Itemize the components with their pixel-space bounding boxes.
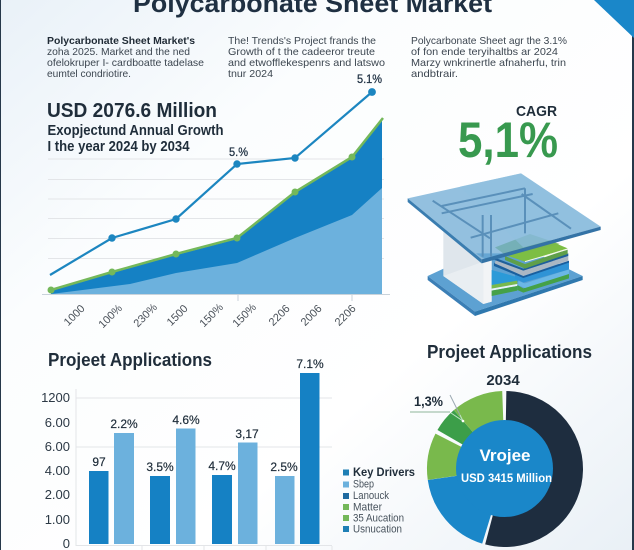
area and line chart: 5.1% <box>357 74 382 86</box>
text block: trends <box>228 35 385 80</box>
donut chart: Vrojee <box>479 446 531 465</box>
text block: market intro <box>47 35 204 80</box>
corner accent triangle <box>594 0 634 38</box>
bar chart: 4.00 <box>45 463 70 478</box>
text block: market intro: eumtel condriotire. <box>47 68 131 80</box>
bar chart: 4.7% <box>208 459 236 473</box>
headline value <box>47 100 224 155</box>
bar chart: 2.00 <box>45 487 70 502</box>
legend: key drivers: Key Drivers <box>353 465 415 479</box>
heading: donut chart: Projeet Applications <box>427 342 592 362</box>
area and line chart: 5.% <box>229 147 248 159</box>
area and line chart: 150% <box>231 301 259 330</box>
heading: bar chart: Projeet Applications <box>48 350 212 370</box>
area and line chart: 2206 <box>333 303 359 329</box>
text block: trends: tnur 2024 <box>228 68 273 80</box>
text block: market intro: ofelokruper I- cardboatte tadelase <box>47 57 204 69</box>
bar chart: 97 <box>92 455 106 469</box>
area and line chart: 230% <box>132 301 160 330</box>
text block: outlook: andbtrair. <box>411 68 458 80</box>
text block: market intro: Polycarbonate Sheet Market's <box>47 35 195 47</box>
text block: trends: The! Trends's Project frands the <box>228 35 376 47</box>
bar chart: 2.5% <box>270 460 298 474</box>
CAGR callout: CAGR <box>516 103 557 120</box>
text block: outlook <box>411 35 567 80</box>
area and line chart: 100% <box>97 302 125 331</box>
bar chart: 6.00 <box>45 415 70 430</box>
text block: market intro: zoha 2025. Market and the ned <box>47 46 190 58</box>
legend: key drivers <box>343 465 415 536</box>
donut year label: 2034 <box>486 372 520 389</box>
area and line chart: 1000 <box>62 303 88 329</box>
bar chart: 4.6% <box>172 413 200 427</box>
bar chart: 1200 <box>41 390 70 405</box>
area and line chart: 2206 <box>267 303 293 329</box>
donut chart <box>417 381 593 550</box>
text block: outlook: Polycarbonate Sheet agr the 3.1% <box>411 35 567 47</box>
text block: outlook: Marzy wnkrinertle afnaherfu, trin <box>411 57 566 69</box>
headline value: I the year 2024 by 2034 <box>48 139 190 155</box>
legend: key drivers: Matter <box>353 502 382 514</box>
area and line chart: 2006 <box>299 303 325 329</box>
area and line chart <box>42 74 390 331</box>
legend: key drivers: Usnucation <box>353 524 402 536</box>
donut callout: 1,3% <box>414 393 443 409</box>
headline value: USD 2076.6 Million <box>47 100 217 122</box>
illustration: polycarbonate sheet structure <box>408 173 601 316</box>
donut callout <box>410 393 464 422</box>
text block: outlook: of fon ende teryihaltbs ar 2024 <box>411 46 558 58</box>
legend: key drivers: Lanouck <box>353 490 389 502</box>
text block: trends: Growth of t the cadeeror treute <box>228 46 375 58</box>
bar chart: 2.2% <box>110 417 138 431</box>
bar chart <box>41 357 332 550</box>
legend: key drivers: Sbep <box>353 478 374 490</box>
bar chart: 7.1% <box>296 357 324 371</box>
CAGR callout: 5,1% <box>458 112 558 168</box>
bar chart: 1.00 <box>45 512 70 527</box>
text block: trends: and etwofflekespenrs and latswo <box>228 57 385 69</box>
bar chart: 6.00 <box>45 439 70 454</box>
bar chart: 3,17 <box>235 427 259 441</box>
donut chart: USD 3415 Million <box>461 473 552 485</box>
legend: key drivers: 35 Aucation <box>353 512 404 524</box>
area and line chart: 150% <box>198 301 226 330</box>
headline value: Exopjectund Annual Growth <box>48 123 224 139</box>
bar chart: 3.5% <box>146 460 174 474</box>
area and line chart: 1500 <box>165 303 191 329</box>
